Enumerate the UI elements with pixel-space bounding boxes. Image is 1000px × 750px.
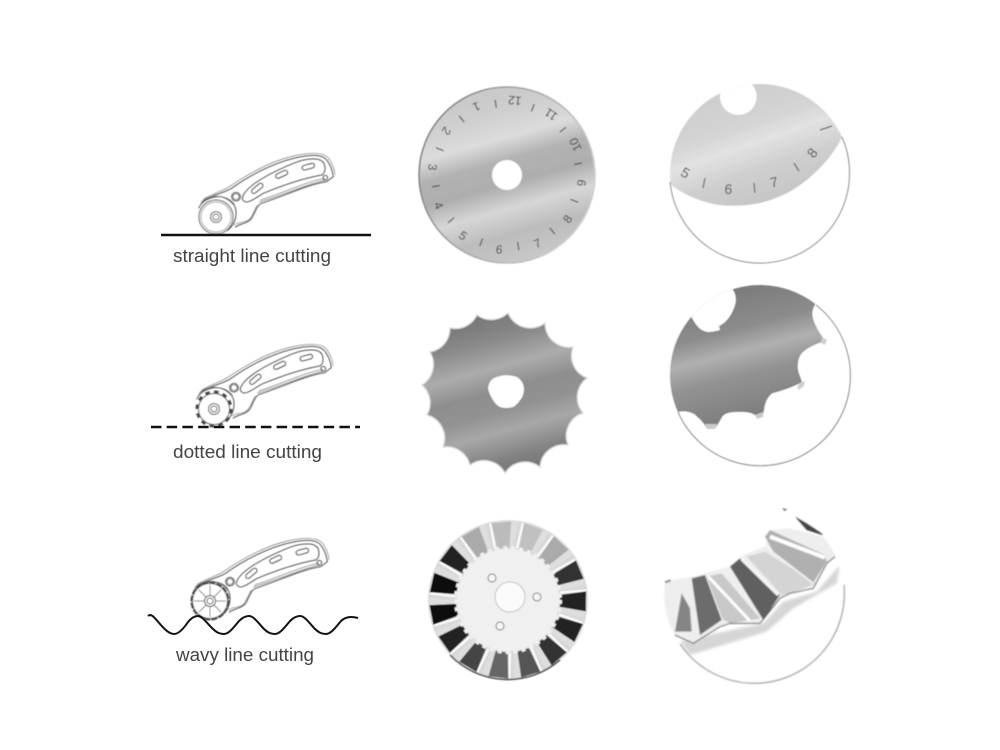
blade: straight blade with numbered scale: 11	[542, 105, 560, 124]
detail: straight blade close-up: 6	[724, 181, 733, 197]
straight cutting line	[161, 234, 371, 236]
detail: wave blade close-up	[663, 508, 844, 683]
detail: straight blade close-up	[669, 84, 851, 264]
blade: straight blade with numbered scale: 8	[560, 212, 575, 226]
label: straight line cutting: straight line cutting	[173, 246, 331, 266]
blade: straight blade with numbered scale	[419, 87, 595, 263]
blade: straight blade with numbered scale: 6	[495, 242, 504, 257]
blade: wave blade	[427, 520, 589, 681]
detail: straight blade close-up: 8	[804, 145, 821, 161]
icon: dotted line rotary cutter	[197, 344, 333, 426]
blade: straight blade with numbered scale: 4	[431, 200, 446, 212]
blade: straight blade with numbered scale: 5	[456, 228, 470, 243]
blade: straight blade with numbered scale: 10	[566, 135, 585, 153]
icon: wavy line rotary cutter	[192, 538, 329, 620]
blade: scalloped blade	[422, 313, 587, 473]
blade: straight blade with numbered scale: 12	[507, 93, 522, 108]
detail: straight blade close-up: 5	[678, 164, 693, 182]
dotted cutting line	[151, 426, 360, 428]
detail: straight blade close-up: 7	[768, 173, 780, 191]
label: dotted line cutting: dotted line cutting	[173, 442, 322, 462]
blade: straight blade with numbered scale: 1	[470, 99, 482, 114]
label: wavy line cutting: wavy line cutting	[175, 645, 314, 665]
blade: straight blade with numbered scale: 9	[574, 178, 589, 187]
icon: straight line rotary cutter	[199, 153, 335, 234]
blade: straight blade with numbered scale: 3	[425, 163, 440, 172]
wavy cutting line	[148, 615, 358, 634]
blade: straight blade with numbered scale: 7	[532, 236, 544, 251]
detail: scalloped blade close-up	[670, 284, 852, 467]
blade: straight blade with numbered scale: 2	[439, 124, 454, 138]
